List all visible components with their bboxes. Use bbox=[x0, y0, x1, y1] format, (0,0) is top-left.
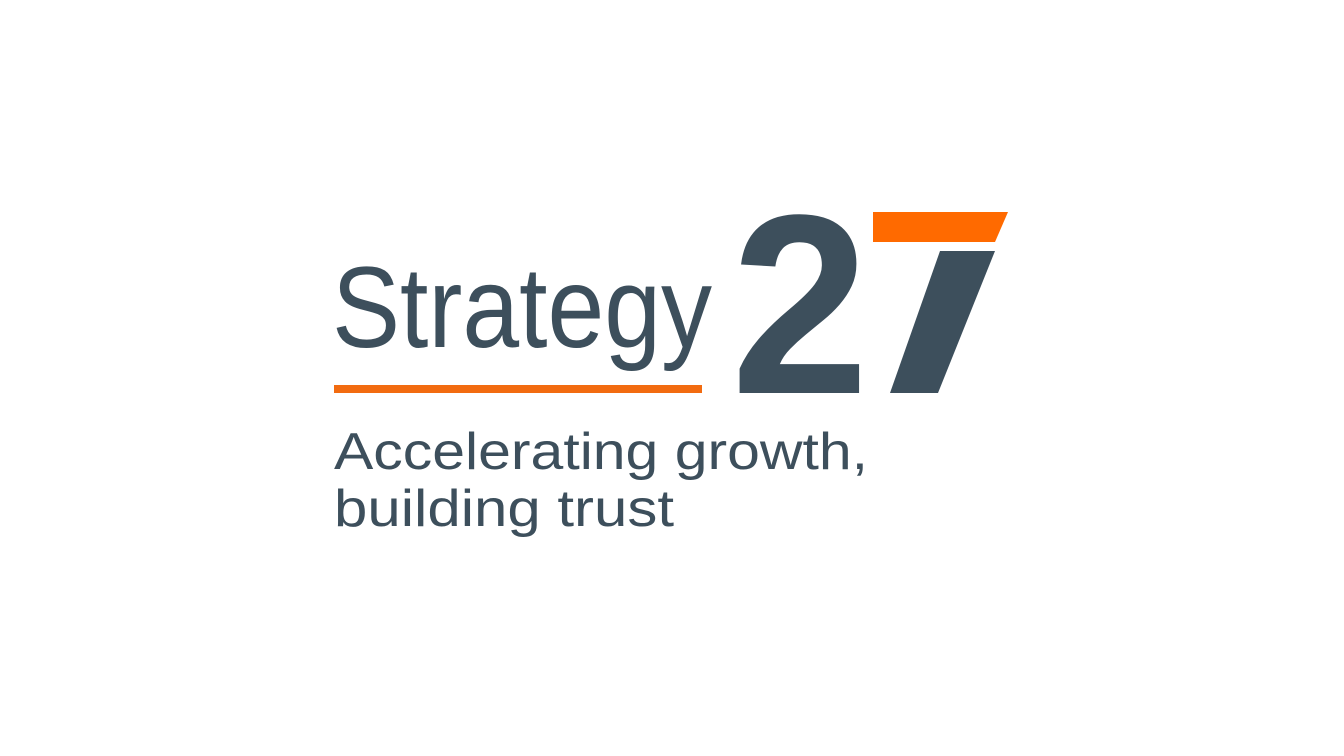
numeral 2: 2 bbox=[731, 162, 869, 448]
tagline: building trust bbox=[334, 480, 675, 538]
numeral 7 mark bbox=[873, 212, 1008, 393]
wordmark: Strategy: Strategy bbox=[332, 244, 712, 372]
tagline bbox=[334, 423, 868, 538]
tagline: Accelerating growth, bbox=[334, 423, 868, 481]
orange underline bbox=[334, 385, 702, 393]
